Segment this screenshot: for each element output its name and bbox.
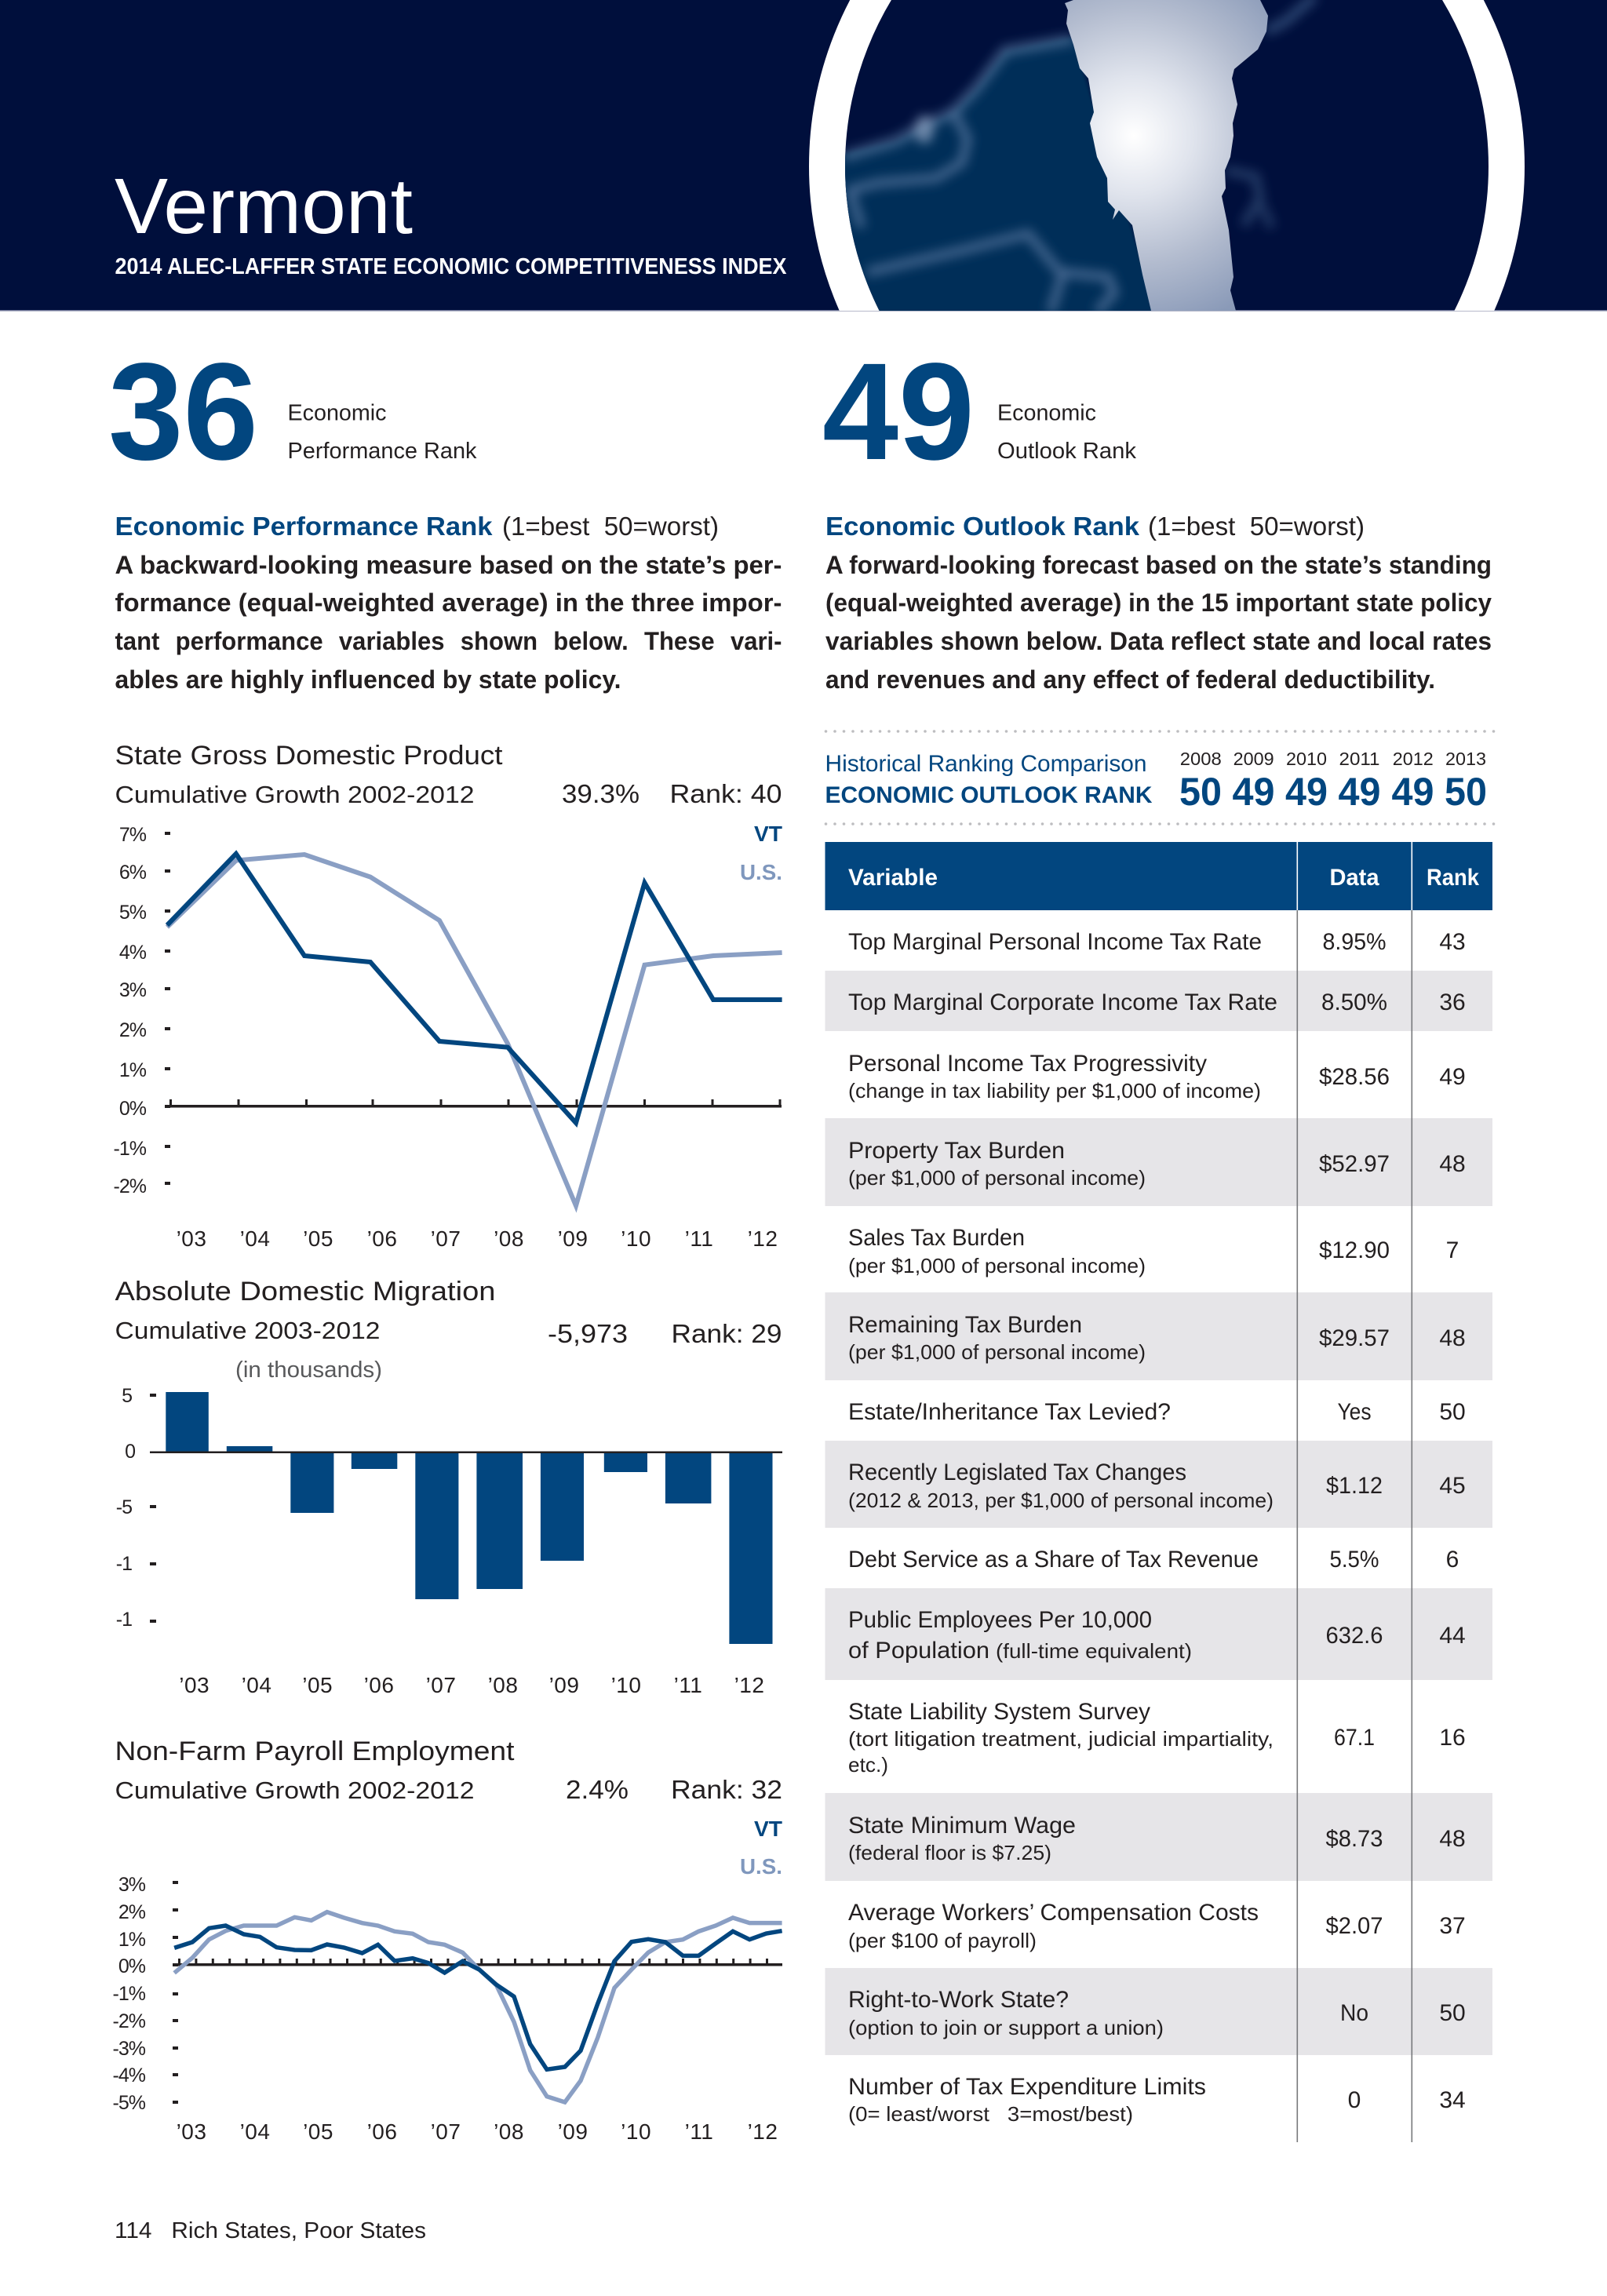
y axis labels: 4% xyxy=(119,942,147,964)
y axis labels: -4% xyxy=(113,2065,146,2086)
row: top marginal corporate income tax rate: 8.50% xyxy=(1321,989,1387,1015)
y axis labels: 3% xyxy=(118,1874,146,1896)
y axis labels: 0% xyxy=(119,1098,147,1120)
row: state liability system survey: (tort litigation treatment, judicial impartiality, xyxy=(848,1727,1274,1751)
rank caption xyxy=(287,400,477,464)
rank description: formance (equal-weighted average) in the three impor- xyxy=(115,589,782,617)
row: personal income tax progressivity: 49 xyxy=(1439,1064,1466,1090)
row: right-to-work state: (option to join or support a union) xyxy=(848,2016,1164,2039)
bars xyxy=(166,1392,773,1644)
rank caption: Economic xyxy=(997,400,1096,425)
panel: state gross domestic product chart xyxy=(114,741,782,1251)
panel: absolute domestic migration chart xyxy=(115,1277,782,1697)
y axis labels: 2% xyxy=(119,1019,147,1041)
row: recently legislated tax changes xyxy=(848,1460,1466,1512)
row: state liability system survey xyxy=(848,1699,1466,1777)
row: workers compensation costs xyxy=(848,1900,1466,1952)
big rank number 36: 36 xyxy=(108,335,258,489)
row: property tax burden: (per $1,000 of personal income) xyxy=(848,1166,1146,1190)
row: state minimum wage: (federal floor is $7.25) xyxy=(848,1841,1051,1864)
comparison ranks: 49 xyxy=(1232,770,1274,814)
big rank number 49: 49 xyxy=(822,335,975,489)
y axis labels: 2% xyxy=(118,1901,146,1923)
y axis labels: 6% xyxy=(119,862,147,884)
x axis year labels: ’03 xyxy=(177,1226,206,1251)
legend U.S.: U.S. xyxy=(740,1854,782,1879)
zero axis xyxy=(150,1452,782,1453)
row: personal income tax progressivity: Personal Income Tax Progressivity xyxy=(848,1051,1207,1077)
comparison ranks: 49 xyxy=(1285,770,1328,814)
y axis labels xyxy=(116,1385,135,1631)
x axis year labels: ’08 xyxy=(494,2119,524,2144)
row: sales tax burden: 7 xyxy=(1446,1237,1459,1263)
row: sales tax burden: $12.90 xyxy=(1319,1237,1390,1263)
map medallion xyxy=(809,0,1525,311)
chart heading: Rank: 32 xyxy=(671,1775,782,1804)
x axis year labels: ’12 xyxy=(748,1226,778,1251)
rank heading: Economic Performance Rank xyxy=(115,512,493,541)
legend VT: VT xyxy=(754,822,782,846)
rank heading: Economic Outlook Rank xyxy=(825,512,1140,541)
y axis labels: 0% xyxy=(118,1955,146,1977)
comparison years xyxy=(1180,749,1486,769)
x axis year labels: ’12 xyxy=(748,2119,778,2144)
y axis ticks xyxy=(173,1881,178,2104)
row: public employees: (full-time equivalent) xyxy=(996,1639,1192,1663)
row: top marginal corporate income tax rate xyxy=(848,989,1466,1015)
row: public employees: 632.6 xyxy=(1326,1623,1383,1649)
U.S. line xyxy=(167,855,782,1206)
row: right-to-work state: 50 xyxy=(1439,2000,1466,2026)
row: sales tax burden: Sales Tax Burden xyxy=(848,1225,1025,1251)
rank description: A forward-looking forecast based on the state’s standing xyxy=(825,551,1492,579)
x axis year labels: ’11 xyxy=(685,1226,713,1251)
comparison ranks: 50 xyxy=(1445,770,1487,814)
row: public employees: 44 xyxy=(1439,1623,1466,1649)
chart heading xyxy=(115,1277,782,1383)
state title: Vermont xyxy=(115,162,413,250)
x axis year labels: ’11 xyxy=(685,2119,713,2144)
x axis year labels xyxy=(177,2119,778,2144)
striped row backgrounds xyxy=(825,971,1492,2055)
x axis year labels: ’04 xyxy=(242,1673,271,1697)
zero axis with ticks xyxy=(178,1962,782,1966)
y axis ticks and zero axis xyxy=(165,832,782,1185)
y axis labels xyxy=(113,1874,146,2114)
row: right-to-work state xyxy=(848,1987,1466,2039)
y axis labels: 7% xyxy=(119,824,147,846)
x axis year labels: ’09 xyxy=(558,2119,588,2144)
row: estate inheritance tax xyxy=(848,1399,1466,1425)
row: state minimum wage: State Minimum Wage xyxy=(848,1813,1076,1839)
x axis year labels: ’06 xyxy=(364,1673,394,1697)
rank caption: Outlook Rank xyxy=(997,439,1136,464)
y axis labels: 5% xyxy=(119,902,147,924)
row: estate inheritance tax: Yes xyxy=(1337,1399,1372,1425)
panel: economic performance rank xyxy=(108,335,782,694)
row: recently legislated tax changes: 45 xyxy=(1439,1473,1466,1499)
row: right-to-work state: Right-to-Work State? xyxy=(848,1987,1069,2013)
legend U.S.: U.S. xyxy=(740,860,782,884)
row: top marginal personal income tax rate xyxy=(848,929,1466,955)
panel: outlook variables table xyxy=(825,842,1492,2142)
row: remaining tax burden: 48 xyxy=(1439,1325,1466,1351)
row: estate inheritance tax: 50 xyxy=(1439,1399,1466,1425)
table header row xyxy=(825,842,1492,910)
rank caption: Performance Rank xyxy=(287,439,477,464)
x axis year labels xyxy=(177,1226,778,1251)
row: tax expenditure limits xyxy=(848,2074,1466,2126)
rank heading: (1=best 50=worst) xyxy=(502,512,719,541)
rank description: A backward-looking measure based on the state’s per- xyxy=(115,551,782,579)
row: personal income tax progressivity: $28.56 xyxy=(1319,1064,1390,1090)
y axis labels: -1 xyxy=(116,1553,132,1575)
chart heading: Cumulative Growth 2002-2012 xyxy=(115,781,474,808)
x axis year labels: ’09 xyxy=(549,1673,579,1697)
x axis year labels: ’09 xyxy=(558,1226,588,1251)
x axis year labels: ’07 xyxy=(431,1226,461,1251)
row: debt service xyxy=(848,1547,1459,1573)
rank heading xyxy=(825,512,1365,541)
row: debt service: 5.5% xyxy=(1329,1547,1379,1573)
row: state liability system survey: State Liability System Survey xyxy=(848,1699,1150,1725)
row: tax expenditure limits: Number of Tax Expenditure Limits xyxy=(848,2074,1206,2100)
row: remaining tax burden: $29.57 xyxy=(1319,1325,1390,1351)
x axis year labels: ’06 xyxy=(367,2119,397,2144)
x axis year labels: ’07 xyxy=(426,1673,456,1697)
rank description: variables shown below. Data reflect state and local rates xyxy=(825,627,1492,655)
panel: historical ranking comparison xyxy=(825,731,1495,824)
chart heading: Absolute Domestic Migration xyxy=(115,1277,496,1307)
comparison labels: ECONOMIC OUTLOOK RANK xyxy=(825,782,1153,808)
row: workers compensation costs: 37 xyxy=(1439,1913,1466,1939)
row: state liability system survey: 67.1 xyxy=(1334,1725,1375,1751)
chart heading: Rank: 29 xyxy=(672,1319,782,1348)
chart heading: State Gross Domestic Product xyxy=(115,741,503,771)
table header row: Rank xyxy=(1427,865,1479,891)
row: top marginal corporate income tax rate: 36 xyxy=(1439,989,1466,1015)
row: recently legislated tax changes: (2012 & 2013, per $1,000 of personal income) xyxy=(848,1489,1274,1512)
x axis year labels: ’11 xyxy=(674,1673,702,1697)
comparison labels: Historical Ranking Comparison xyxy=(825,751,1147,777)
rank caption: Economic xyxy=(287,400,386,425)
x axis year labels xyxy=(179,1673,764,1697)
x axis year labels: ’12 xyxy=(734,1673,764,1697)
chart heading: 2.4% xyxy=(566,1775,629,1804)
rank description: tant performance variables shown below. These vari- xyxy=(115,627,782,655)
chart heading: (in thousands) xyxy=(235,1358,382,1383)
row: personal income tax progressivity xyxy=(848,1051,1466,1102)
row: remaining tax burden xyxy=(848,1312,1466,1364)
x axis year labels: ’07 xyxy=(431,2119,461,2144)
comparison years: 2012 xyxy=(1393,749,1434,769)
comparison years: 2013 xyxy=(1445,749,1486,769)
x axis year labels: ’05 xyxy=(303,1226,333,1251)
x axis year labels: ’06 xyxy=(367,1226,397,1251)
x axis year labels: ’03 xyxy=(179,1673,210,1697)
row: public employees: of Population xyxy=(848,1638,989,1664)
rank heading xyxy=(115,512,719,541)
panel: economic outlook rank xyxy=(822,335,1492,694)
row: property tax burden: $52.97 xyxy=(1319,1151,1390,1177)
column dividers xyxy=(1296,910,1412,2142)
x axis year labels: ’04 xyxy=(240,2119,270,2144)
table header row: Data xyxy=(1329,865,1379,891)
row: remaining tax burden: Remaining Tax Burden xyxy=(848,1312,1082,1338)
header banner xyxy=(0,0,1607,311)
row: workers compensation costs: Average Workers’ Compensation Costs xyxy=(848,1900,1259,1926)
y axis labels: -5% xyxy=(113,2092,146,2114)
comparison years: 2009 xyxy=(1233,749,1274,769)
y axis labels: -5 xyxy=(116,1496,132,1518)
row: recently legislated tax changes: Recently Legislated Tax Changes xyxy=(848,1460,1186,1485)
chart heading: Rank: 40 xyxy=(670,779,782,808)
chart heading xyxy=(115,741,782,808)
rank description: ables are highly influenced by state policy. xyxy=(115,665,621,694)
rank caption xyxy=(997,400,1136,464)
y axis labels: -1% xyxy=(113,1983,146,2005)
y axis labels: -2% xyxy=(114,1175,147,1197)
x axis year labels: ’08 xyxy=(488,1673,518,1697)
x axis year labels: ’10 xyxy=(611,1673,641,1697)
U.S. line xyxy=(174,1912,782,2102)
comparison years: 2011 xyxy=(1339,749,1379,769)
chart heading xyxy=(115,1737,782,1804)
x axis year labels: ’05 xyxy=(303,2119,333,2144)
comparison years: 2008 xyxy=(1180,749,1222,769)
y axis labels: -2% xyxy=(113,2010,146,2032)
row: recently legislated tax changes: $1.12 xyxy=(1326,1473,1383,1499)
row: public employees: Public Employees Per 10,000 xyxy=(848,1607,1152,1633)
comparison ranks: 49 xyxy=(1392,770,1434,814)
comparison ranks: 50 xyxy=(1179,770,1222,814)
row: sales tax burden: (per $1,000 of personal income) xyxy=(848,1254,1146,1277)
y axis labels: 3% xyxy=(119,979,147,1001)
row: right-to-work state: No xyxy=(1340,2000,1368,2026)
rank heading: (1=best 50=worst) xyxy=(1148,512,1365,541)
x axis year labels: ’03 xyxy=(177,2119,206,2144)
row: estate inheritance tax: Estate/Inheritance Tax Levied? xyxy=(848,1399,1171,1425)
chart heading: Cumulative 2003-2012 xyxy=(115,1317,380,1344)
row: state minimum wage: $8.73 xyxy=(1326,1826,1383,1852)
comparison labels xyxy=(825,751,1153,808)
row: workers compensation costs: (per $100 of payroll) xyxy=(848,1929,1037,1952)
y axis ticks xyxy=(150,1394,156,1623)
x axis year labels: ’10 xyxy=(621,2119,651,2144)
y axis labels: 1% xyxy=(118,1929,146,1951)
y axis labels: 5 xyxy=(122,1385,132,1407)
row: debt service: Debt Service as a Share of Tax Revenue xyxy=(848,1547,1259,1573)
chart heading: -5,973 xyxy=(548,1319,628,1348)
x axis year labels: ’08 xyxy=(494,1226,524,1251)
chart heading: Non-Farm Payroll Employment xyxy=(115,1737,515,1766)
row: property tax burden xyxy=(848,1138,1466,1190)
x axis year labels: ’05 xyxy=(302,1673,333,1697)
x axis year labels: ’10 xyxy=(621,1226,651,1251)
VT line xyxy=(174,1926,782,2069)
row: top marginal personal income tax rate: Top Marginal Personal Income Tax Rate xyxy=(848,929,1262,955)
row: property tax burden: 48 xyxy=(1439,1151,1466,1177)
y axis labels: -1 xyxy=(116,1609,132,1631)
y axis labels: 1% xyxy=(119,1059,147,1081)
rank description: and revenues and any effect of federal deductibility. xyxy=(825,665,1435,694)
row: top marginal personal income tax rate: 8.95% xyxy=(1323,929,1386,955)
rank description xyxy=(825,551,1492,694)
comparison ranks xyxy=(1179,770,1487,814)
row: debt service: 6 xyxy=(1446,1547,1459,1573)
comparison ranks: 49 xyxy=(1339,770,1381,814)
row: top marginal personal income tax rate: 43 xyxy=(1439,929,1466,955)
subtitle: 2014 ALEC-LAFFER STATE ECONOMIC COMPETITIVENESS INDEX xyxy=(115,254,786,279)
rank description: (equal-weighted average) in the 15 important state policy xyxy=(825,589,1492,617)
row: state minimum wage xyxy=(848,1813,1466,1864)
row: workers compensation costs: $2.07 xyxy=(1326,1913,1383,1939)
row: public employees xyxy=(848,1607,1466,1664)
Vermont state shape xyxy=(1065,0,1268,311)
row: tax expenditure limits: (0= least/worst 3=most/best) xyxy=(848,2102,1133,2126)
chart heading: Cumulative Growth 2002-2012 xyxy=(115,1777,474,1804)
y axis labels: -1% xyxy=(114,1138,147,1160)
row: tax expenditure limits: 0 xyxy=(1348,2087,1361,2113)
y axis labels: 0 xyxy=(125,1441,135,1463)
row: state minimum wage: 48 xyxy=(1439,1826,1466,1852)
row: personal income tax progressivity: (change in tax liability per $1,000 of income) xyxy=(848,1079,1261,1102)
row: remaining tax burden: (per $1,000 of personal income) xyxy=(848,1340,1146,1364)
footer page reference: 114 Rich States, Poor States xyxy=(115,2218,426,2243)
row: tax expenditure limits: 34 xyxy=(1439,2087,1466,2113)
row: property tax burden: Property Tax Burden xyxy=(848,1138,1065,1164)
comparison years: 2010 xyxy=(1286,749,1327,769)
legend VT: VT xyxy=(754,1817,782,1841)
y axis labels: -3% xyxy=(113,2038,146,2060)
VT line xyxy=(167,854,782,1123)
table header row: Variable xyxy=(848,865,938,891)
chart heading: 39.3% xyxy=(562,779,640,808)
row: state liability system survey: 16 xyxy=(1439,1725,1466,1751)
y axis labels xyxy=(114,824,147,1197)
row: state liability system survey: etc.) xyxy=(848,1753,888,1777)
panel: non-farm payroll employment chart xyxy=(113,1737,782,2144)
rank description xyxy=(115,551,782,694)
row: top marginal corporate income tax rate: Top Marginal Corporate Income Tax Rate xyxy=(848,989,1277,1015)
row: sales tax burden xyxy=(848,1225,1459,1277)
x axis year labels: ’04 xyxy=(240,1226,270,1251)
